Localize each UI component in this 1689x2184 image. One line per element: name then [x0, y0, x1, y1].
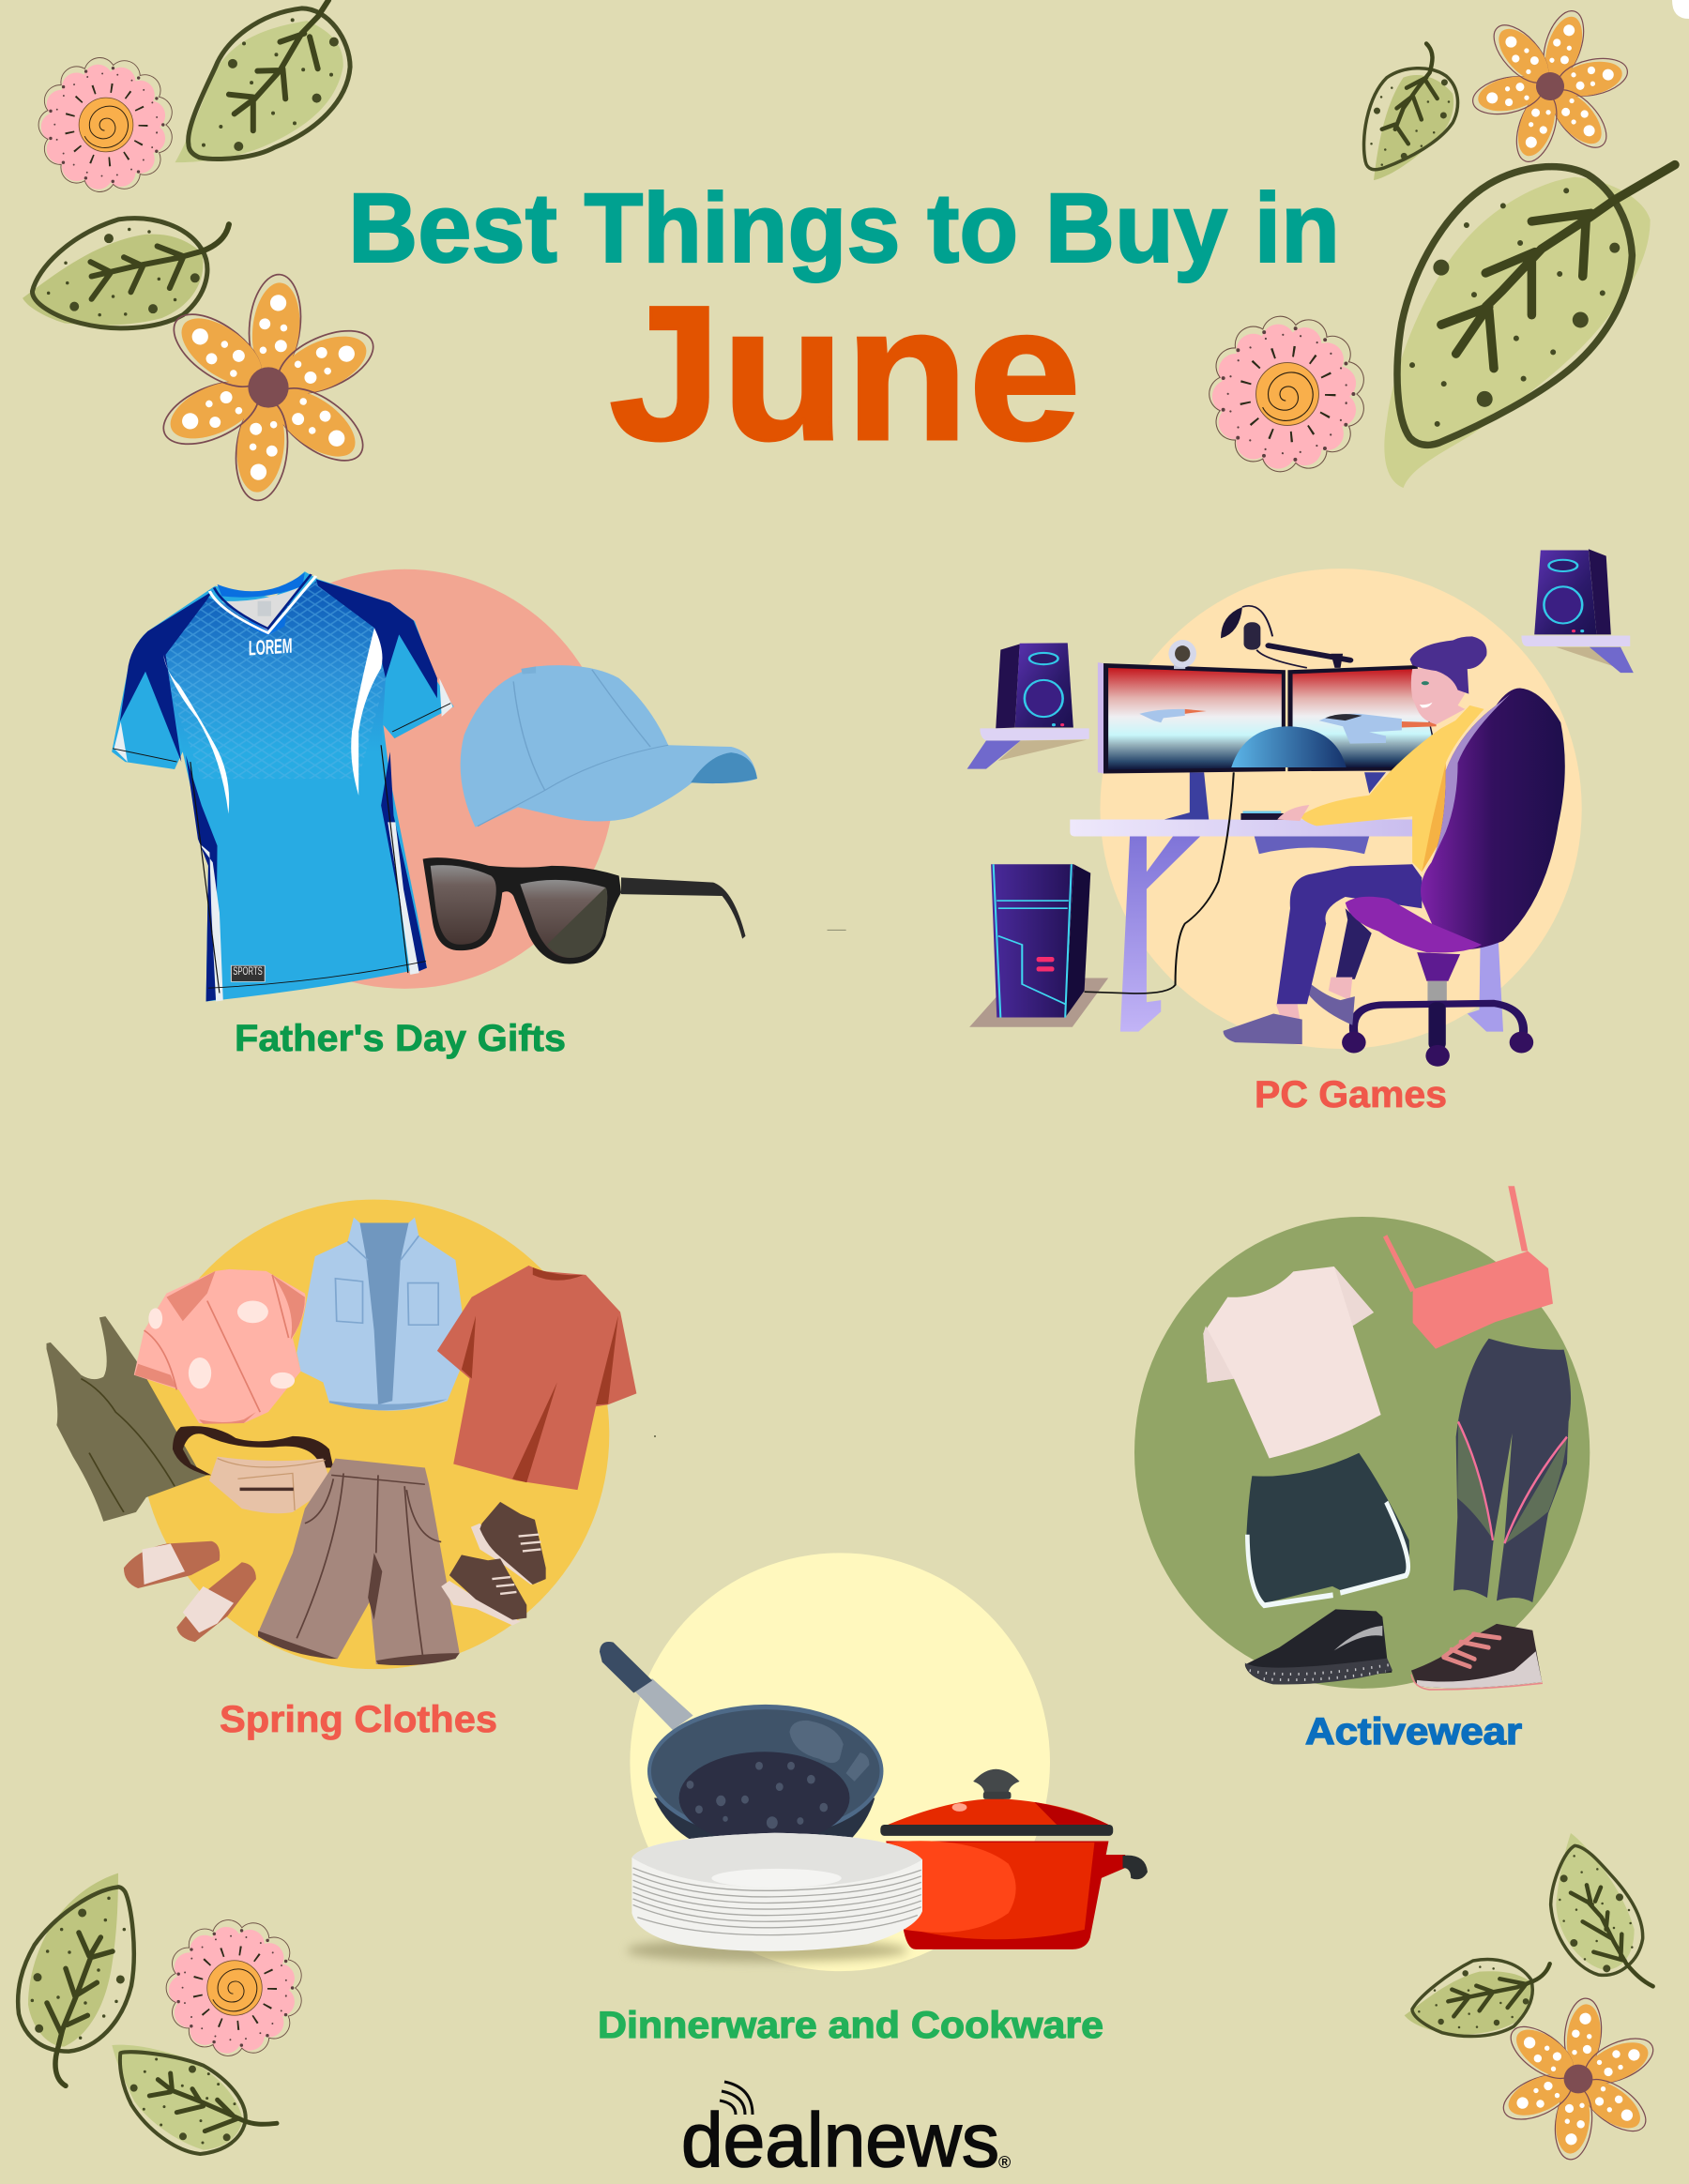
icon: orange flower left: [155, 272, 382, 503]
icon: left speaker on shelf: [967, 643, 1089, 769]
panel: Father's Day Gifts: [112, 569, 846, 1059]
panel: PC Games: [967, 549, 1634, 1115]
icon: leaf top-left: [175, 0, 350, 162]
decoration: bottom-left flowers and leaves: [18, 1873, 301, 2154]
icon: coral sports bra: [1383, 1186, 1553, 1349]
icon: light blue cap: [461, 665, 757, 827]
icon: PC tower: [991, 864, 1090, 1018]
icon: pink patterned shirt: [134, 1269, 306, 1424]
backdrop circle: salmon: [195, 569, 615, 989]
logo wordmark: dealnews: [681, 2098, 999, 2183]
icon: sandal left: [124, 1541, 220, 1588]
icon: leaf mid-left: [23, 219, 229, 328]
icon: orange flower top-right: [1456, 0, 1644, 181]
backdrop circle: pale yellow: [630, 1553, 1050, 1971]
icon: gamer person: [1224, 636, 1486, 1044]
icon: blue jersey: [112, 571, 454, 1001]
label: Dinnerware and Cookware: Dinnerware and Cookware: [598, 2005, 1103, 2046]
icon: leaf bottom-left: [112, 2045, 277, 2154]
icon: keyboard: [1240, 811, 1284, 820]
backdrop circle: green: [1134, 1217, 1590, 1689]
stray mark: [828, 929, 846, 932]
logo signal arcs: [720, 2082, 753, 2115]
label: PC Games: PC Games: [1255, 1074, 1447, 1115]
icon: pale pink tee: [1203, 1266, 1381, 1459]
icon: tower shadow: [969, 978, 1108, 1027]
icon: stack of white plates: [631, 1833, 922, 1951]
icon: dual monitors: [1098, 662, 1441, 774]
icon: microphone on boom arm: [1221, 606, 1350, 668]
icon: large leaf top-right: [1384, 165, 1675, 488]
icon: leaf bottom-right lower: [1405, 1960, 1550, 2037]
backdrop circle: yellow: [140, 1200, 609, 1669]
plate shadow: [626, 1939, 908, 1962]
icon: taupe shorts: [258, 1459, 460, 1665]
icon: pink flower bottom-left: [166, 1920, 301, 2055]
icon: black sunglasses: [423, 857, 745, 963]
icon: dark teal shorts: [1246, 1453, 1409, 1605]
icon: pink flower right: [1210, 316, 1363, 472]
icon: vertical leaf bottom-left: [18, 1873, 134, 2085]
icon: red pot with lid: [880, 1769, 1148, 1949]
icon: olive tank top: [47, 1316, 207, 1522]
icon: sneaker upper: [471, 1502, 546, 1585]
panel: Spring Clothes: [47, 1200, 636, 1740]
backdrop circle: peach: [1100, 569, 1582, 1049]
title: June: June: [609, 266, 1081, 480]
logo registered mark: ®: [998, 2153, 1011, 2172]
label: Activewear: Activewear: [1305, 1711, 1522, 1752]
jersey label: SPORTS: [233, 965, 263, 978]
label: Spring Clothes: Spring Clothes: [220, 1699, 497, 1740]
title: Best Things to Buy in: Best Things to Buy in: [348, 174, 1340, 283]
icon: desk: [1070, 819, 1503, 1032]
icon: sneaker lower: [441, 1555, 526, 1626]
icon: frying pan: [600, 1642, 883, 1844]
icon: sandal right: [176, 1562, 256, 1642]
jersey label: [231, 965, 265, 981]
label: Father's Day Gifts: Father's Day Gifts: [235, 1018, 566, 1059]
icon: monitor stands: [1164, 772, 1386, 819]
white page corner: [1672, 0, 1689, 19]
icon: black sneaker: [1245, 1609, 1392, 1685]
panel: Activewear: [1134, 1186, 1590, 1752]
panel: Dinnerware and Cookware: [598, 1553, 1148, 2046]
icon: light blue denim shirt: [297, 1218, 464, 1411]
icon: gaming chair seat and back: [1346, 688, 1565, 952]
decoration: top-left flowers and leaves: [23, 0, 382, 503]
icon: orange flower bottom-right: [1497, 1996, 1660, 2161]
icon: gaming chair back legs and base: [1342, 952, 1533, 1067]
icon: webcam: [1168, 640, 1196, 669]
icon: dark leggings: [1453, 1339, 1571, 1602]
stray speck: [654, 1435, 656, 1437]
icon: pink flower top-left: [38, 58, 172, 191]
icon: beige belt bag: [173, 1426, 333, 1513]
icon: cable: [1085, 772, 1234, 993]
decoration: top-right flowers and leaves: [1210, 0, 1675, 488]
decoration: bottom-right flowers and leaves: [1405, 1833, 1660, 2161]
icon: right speaker on shelf: [1521, 549, 1634, 673]
logo: dealnews: [681, 2082, 1011, 2183]
icon: small leaf top-right: [1364, 43, 1458, 180]
icon: leaf bottom-right upper: [1551, 1833, 1653, 1986]
icon: rust t-shirt: [437, 1266, 636, 1490]
icon: brown sneaker with pink laces: [1411, 1624, 1543, 1690]
icon: blue jersey: LOREM: [247, 633, 294, 660]
